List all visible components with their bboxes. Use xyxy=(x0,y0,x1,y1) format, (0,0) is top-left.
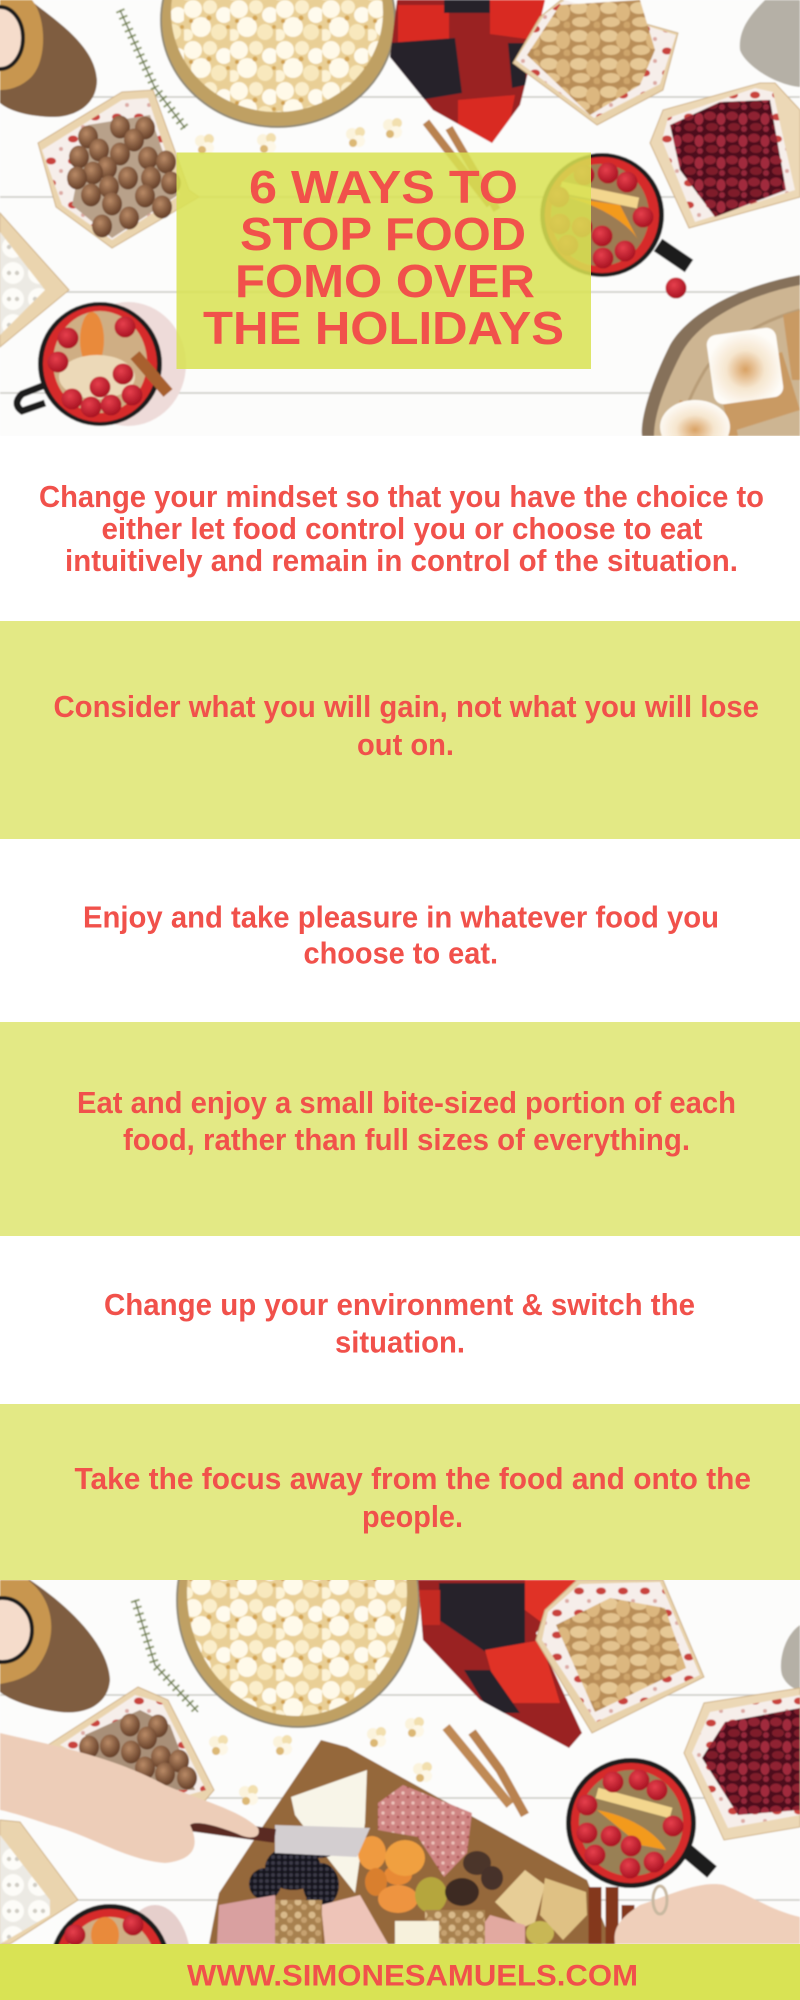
wood slab with toasted marshmallows xyxy=(642,275,800,454)
title text: THE HOLIDAYS xyxy=(203,302,564,354)
tip 3: choose to eat. xyxy=(304,936,498,970)
blackberries xyxy=(248,1851,340,1905)
left hand holding knife xyxy=(0,1733,370,1863)
basket: dried cranberries xyxy=(684,1688,800,1840)
tip 1: Change your mindset so that you have the choice to xyxy=(39,479,764,514)
basket: white pretzels xyxy=(0,1820,78,1944)
tip 3: Enjoy and take pleasure in whatever food you xyxy=(83,900,719,934)
icon: wooden log candle xyxy=(0,0,97,117)
title panel xyxy=(176,152,591,369)
dried apricots xyxy=(358,1836,425,1913)
tip 6: Take the focus away from the food and onto the xyxy=(74,1461,751,1496)
header photo: holiday snack table xyxy=(0,0,800,454)
tip 2 xyxy=(0,621,800,839)
basket: cookies xyxy=(536,1580,704,1733)
mug: mulled cider right xyxy=(566,1758,712,1888)
tip 4 xyxy=(0,1022,800,1236)
basket: cookies xyxy=(513,0,678,125)
icon: thyme sprig xyxy=(120,10,185,128)
mug: mulled cider bottom left xyxy=(50,1904,191,2000)
title text xyxy=(203,161,564,354)
basket: chocolate almonds xyxy=(38,90,199,248)
title text: STOP FOOD xyxy=(240,208,526,260)
plaid napkin xyxy=(415,1580,590,1750)
bottom photo: table with cheese board and hands xyxy=(0,1580,800,1944)
popcorn bowl xyxy=(161,0,395,127)
tip 2: out on. xyxy=(357,727,454,762)
title text: 6 WAYS TO xyxy=(249,161,518,213)
tip 6 xyxy=(0,1404,800,1580)
white cheese xyxy=(395,1921,439,1944)
olives and figs xyxy=(415,1851,554,1945)
tip 1 xyxy=(0,436,800,621)
cured sausage xyxy=(595,1887,628,1944)
plaid napkin xyxy=(389,0,546,144)
vase xyxy=(740,0,800,87)
tip 2: Consider what you will gain, not what you will lose xyxy=(54,689,759,724)
cheese board xyxy=(209,1740,628,1945)
salami xyxy=(378,1785,472,1877)
tip 3 xyxy=(0,839,800,1022)
tip 5 xyxy=(0,1236,800,1404)
icon: wooden log candle xyxy=(0,1580,110,1713)
prosciutto xyxy=(217,1895,525,1944)
right hand with ring xyxy=(615,1884,800,1944)
tip 1: intuitively and remain in control of the situation. xyxy=(65,543,738,578)
tip 4: Eat and enjoy a small bite-sized portion of each xyxy=(77,1085,736,1120)
basket: white pretzels xyxy=(0,213,69,347)
tip 6: people. xyxy=(362,1499,463,1534)
walnuts xyxy=(275,1900,485,1944)
popcorn crumbs and cinnamon sticks xyxy=(195,118,497,210)
brie cheese xyxy=(291,1770,367,1893)
crackers xyxy=(495,1870,587,1940)
title text: FOMO OVER xyxy=(235,255,535,307)
vase xyxy=(781,1625,800,1690)
popcorn crumbs and cinnamon sticks xyxy=(209,1717,525,1815)
basket: dried cranberries xyxy=(650,83,800,228)
website url: WWW.SIMONESAMUELS.COM xyxy=(187,1960,638,1992)
tip 5: Change up your environment & switch the xyxy=(104,1287,695,1322)
popcorn bowl xyxy=(175,1580,422,1729)
footer bar xyxy=(0,1944,800,2000)
icon: thyme sprig xyxy=(135,1600,198,1712)
tip 1: either let food control you or choose to eat xyxy=(102,511,702,546)
mug: mulled cider left xyxy=(17,302,186,426)
tip 5: situation. xyxy=(335,1324,465,1360)
mug: mulled cider right xyxy=(540,153,689,298)
basket: chocolate almonds xyxy=(48,1686,215,1802)
tip 4: food, rather than full sizes of everything. xyxy=(123,1122,690,1157)
